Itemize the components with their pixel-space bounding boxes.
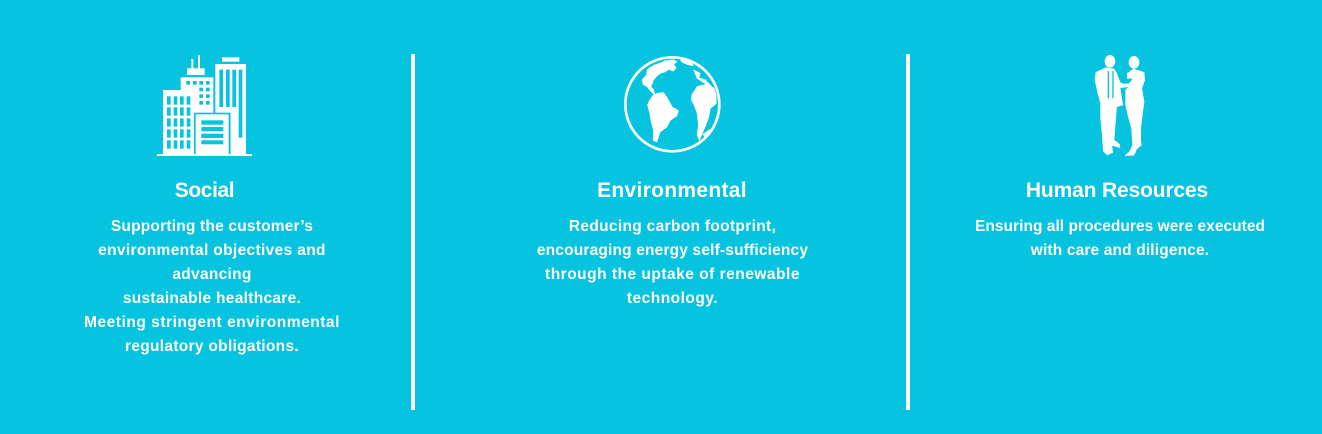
divider [411, 54, 415, 410]
text: environmental description: Reducing carbon footprint, [569, 218, 776, 235]
text: environmental description [537, 218, 808, 307]
icon: two business people [1094, 55, 1145, 156]
text: social description: Meeting stringent environmental [84, 314, 340, 331]
text: human resources description: with care and diligence. [1031, 242, 1209, 259]
text: human resources description [975, 218, 1265, 259]
heading: Environmental: Environmental [597, 179, 747, 202]
panel: environmental [537, 56, 808, 307]
text: social description: environmental objectives and [98, 242, 326, 259]
heading: Human Resources: Human Resources [1026, 179, 1208, 202]
text: environmental description: encouraging energy self-sufficiency [537, 242, 808, 259]
panel: human resources [975, 55, 1265, 259]
icon: globe [624, 56, 721, 153]
heading: Social: Social [175, 179, 234, 202]
text: human resources description: Ensuring all procedures were executed [975, 218, 1265, 235]
text: environmental description: technology. [627, 290, 718, 307]
panel: social [84, 55, 340, 355]
text: social description: Supporting the customer’s [111, 218, 313, 235]
divider [906, 54, 910, 410]
text: social description: regulatory obligations. [125, 338, 299, 355]
text: social description: advancing [172, 266, 252, 283]
icon: city buildings [157, 55, 252, 156]
text: social description: sustainable healthcare. [123, 290, 301, 307]
text: environmental description: through the uptake of renewable [545, 266, 800, 283]
text: social description [84, 218, 340, 355]
